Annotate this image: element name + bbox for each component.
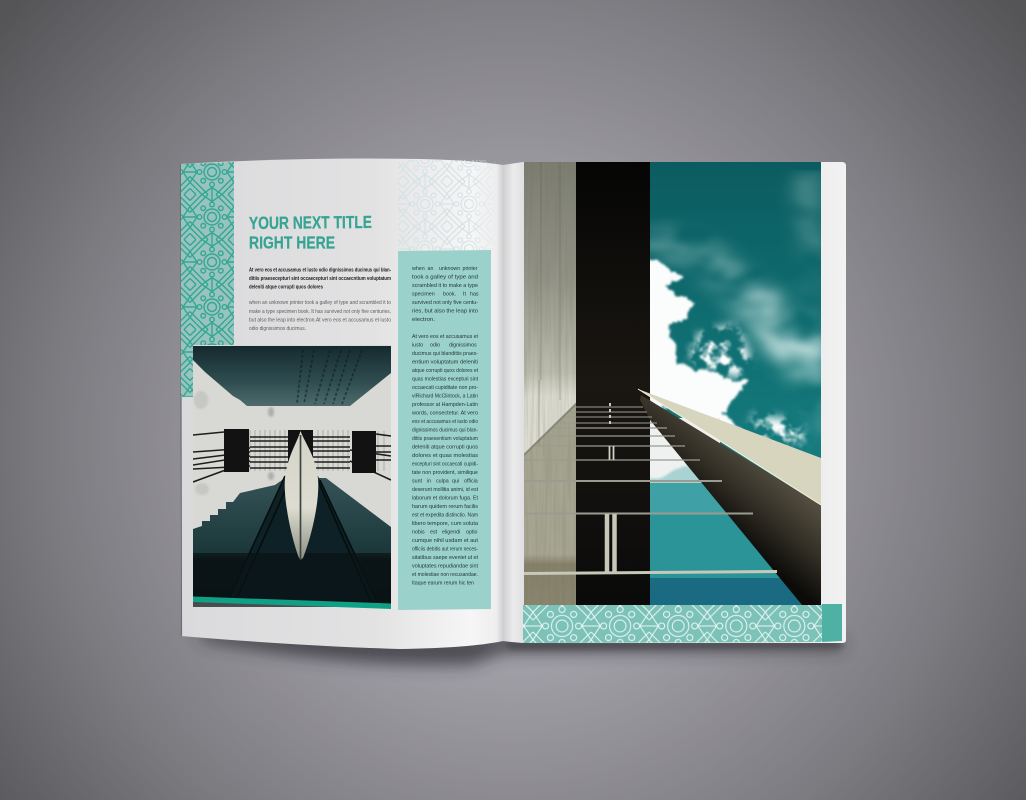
title xyxy=(249,212,372,252)
clouds xyxy=(650,170,821,605)
intro paragraph: At vero eos et accusamus et iusto odio dignissimos ducimus qui blan- xyxy=(249,268,391,274)
body paragraph: when an unknown printer took a galley of type and scrambled it to xyxy=(248,300,391,306)
column text: eligendi xyxy=(442,530,460,536)
lower building xyxy=(193,476,391,607)
column text: dignissimos xyxy=(449,342,477,348)
column text: tate non provident, similique xyxy=(412,470,478,476)
accent bar xyxy=(193,596,391,609)
column text: optio xyxy=(466,530,478,536)
ledge top xyxy=(638,389,821,505)
column text: unknown xyxy=(439,266,460,272)
column text: harum quidem rerum facilis xyxy=(412,504,478,510)
column text: printer xyxy=(462,266,478,272)
column text: sunt xyxy=(412,478,423,484)
column text: survived not only five centu- xyxy=(412,300,478,306)
intro paragraph: ditiis praesecepturi sint occaecepturi sint occaecntium voluptatum xyxy=(249,276,391,282)
panel: teal text column xyxy=(398,250,491,610)
column text: voluptates repudiandae sint xyxy=(412,564,478,570)
column text: electron. xyxy=(412,317,435,323)
photo: building and sky xyxy=(524,162,830,605)
column text: dignissimos ducimus qui blan- xyxy=(412,428,478,434)
column text: At vero eos et accusamus et xyxy=(412,334,478,340)
column text: cumque nihil usdam et aut xyxy=(412,538,478,544)
window bars xyxy=(524,403,777,574)
column text: specimen xyxy=(412,292,435,298)
title: RIGHT HERE xyxy=(249,232,335,252)
column text: qui xyxy=(452,478,459,484)
column text: took a galley of type and xyxy=(412,274,478,280)
column text xyxy=(411,266,479,586)
panel: right page xyxy=(503,162,846,643)
ledge underside xyxy=(640,395,821,605)
column text: est xyxy=(430,530,438,536)
black blocks xyxy=(224,429,376,473)
column text: when xyxy=(412,266,425,272)
photo: mirrored skyscrapers xyxy=(193,345,391,607)
body paragraph: but also the leap into electron.At vero eos et accusamus et iusto xyxy=(249,317,391,323)
column text: in xyxy=(427,478,431,484)
panel: left page xyxy=(180,159,503,649)
column text: ditiis praesentium voluptatum xyxy=(412,436,478,442)
column text: est et expedita distinctio. Nam xyxy=(412,512,478,518)
column text: eos et accusamus et iusto odio xyxy=(412,419,478,425)
title: YOUR NEXT TITLE xyxy=(249,212,372,233)
pattern strip: left teal xyxy=(181,162,234,397)
intro paragraph xyxy=(249,268,391,290)
column text: atque corrupti quos dolores et xyxy=(412,368,478,374)
accent square xyxy=(822,604,842,642)
column text: occaecati cupiditate non pro- xyxy=(412,385,478,391)
column text: deserunt mollitia animi, id est xyxy=(412,487,478,493)
column text: entium voluptatum deleniti xyxy=(412,360,478,366)
intro paragraph: deleniti atque corrupti quos dolores xyxy=(249,284,323,290)
body paragraph xyxy=(248,300,391,332)
column text: libero tempore, cum soluta xyxy=(412,521,479,527)
column text: deleniti atque corrupti quos xyxy=(412,444,478,450)
column text: ducimus qui blanditiis praes- xyxy=(412,351,478,357)
column text: culpa xyxy=(436,478,449,484)
magazine shadow xyxy=(200,630,845,665)
body paragraph: odio dignissimos ducimus. xyxy=(249,326,306,332)
white spindle xyxy=(285,431,318,560)
middle window bands xyxy=(193,430,391,482)
pattern block: pale top right xyxy=(398,160,496,251)
body paragraph: make a type specimen book. It has survived not only five centuries, xyxy=(249,309,391,315)
column text: officiis debitis aut rerum neces- xyxy=(412,546,478,552)
column text: Itaque earum rerum hic ten xyxy=(412,580,474,586)
cloud smudges xyxy=(194,391,274,495)
column text: quas molestias excepturi sint xyxy=(412,376,478,382)
column text: professor at Hampden-Latin xyxy=(412,402,478,408)
column text: scrambled it to make a type xyxy=(412,283,478,289)
column text: sitatibus saepe eveniet ut et xyxy=(412,555,478,561)
column text: book. xyxy=(443,292,456,298)
concrete wall xyxy=(524,162,577,605)
column text: dolores et quas molestias xyxy=(412,453,478,459)
column text: It xyxy=(463,292,466,298)
sky xyxy=(650,162,821,605)
column text: et molestiae non recusandae. xyxy=(412,572,478,578)
column text: has xyxy=(470,292,479,298)
top building xyxy=(193,346,391,406)
column text: odio xyxy=(430,342,440,348)
column text: iusto xyxy=(412,342,423,348)
column text: ries, but also the leap into xyxy=(412,308,478,314)
column text: an xyxy=(428,266,433,272)
column text: words, consectetur. At vero xyxy=(411,410,478,416)
column text: viRichard McClintock, a Latin xyxy=(412,394,478,400)
column text: excepturi sint occaecati cupidi- xyxy=(412,462,478,468)
column text: nobis xyxy=(412,530,425,536)
column text: laborum et dolorum fuga. Et xyxy=(412,496,478,502)
column text: officia xyxy=(464,478,478,484)
pattern strip: bottom xyxy=(523,605,822,643)
dark tower xyxy=(576,162,650,605)
